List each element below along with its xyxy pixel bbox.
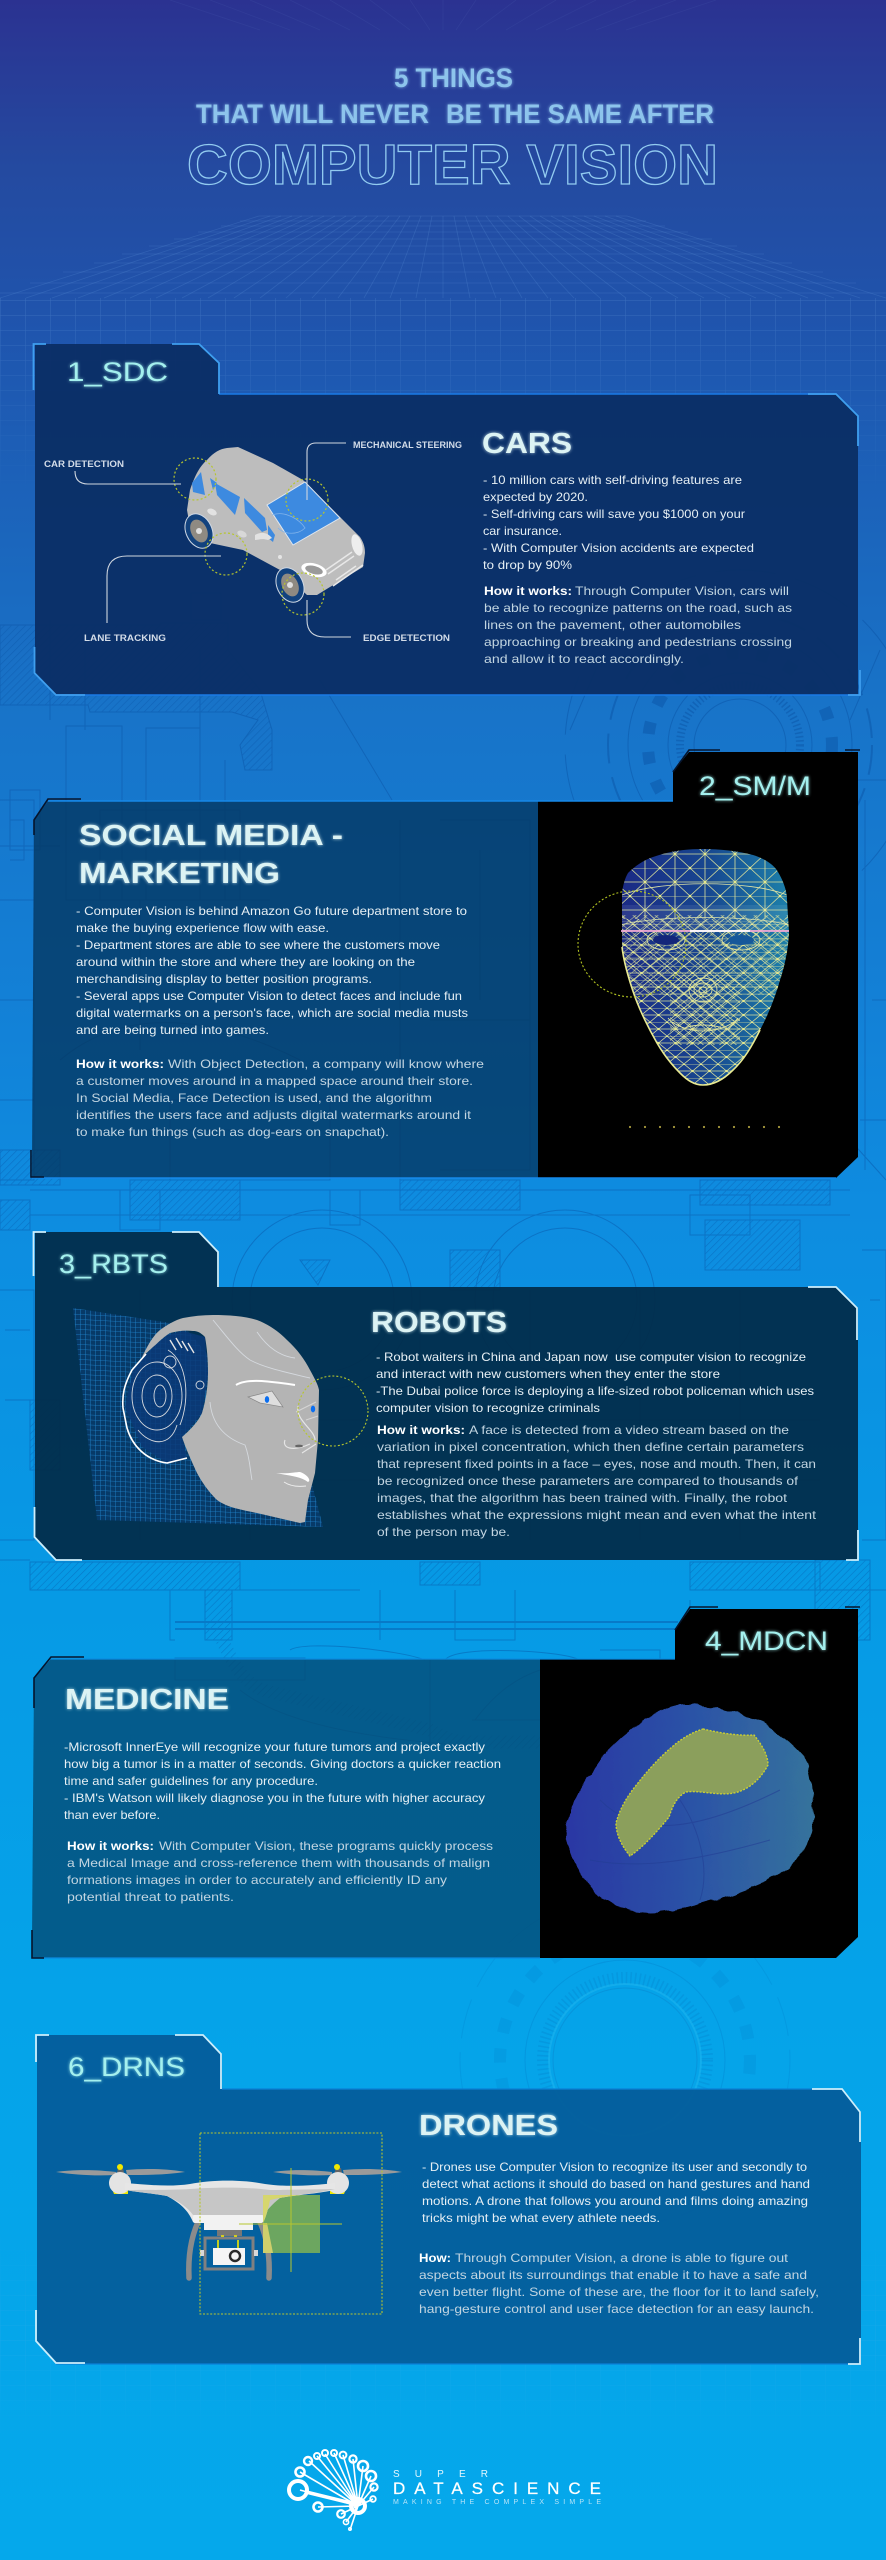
facts text: - Self-driving cars will save you $1000 on your [483, 507, 745, 521]
how it works text: hang-gesture control and user face detection for an easy launch. [419, 2302, 814, 2316]
how it works text: With Computer Vision, these programs quickly process [159, 1839, 493, 1853]
car labels: MECHANICAL STEERING [353, 440, 462, 451]
how it works text [377, 1423, 817, 1539]
logo brain mark [289, 2450, 378, 2530]
facts text: - Computer Vision is behind Amazon Go future department store to [76, 904, 467, 918]
facts text: than ever before. [64, 1808, 160, 1822]
detection circles [174, 458, 328, 615]
title line 2: BE THE SAME AFTER [446, 99, 714, 129]
face mesh [578, 849, 795, 1089]
panel: medicine [32, 1607, 860, 1958]
facts text: digital watermarks on a person's face, which are social media musts [76, 1006, 468, 1020]
target frame [200, 2133, 382, 2314]
panel: social media marketing [31, 750, 860, 1178]
title line 1: 5 THINGS [394, 63, 513, 93]
how it works text [67, 1839, 493, 1904]
brain scan [565, 1704, 814, 1913]
facts text [422, 2160, 810, 2225]
facts text: time and safer guidelines for any procedure. [64, 1774, 318, 1788]
facts text: merchandising display to better position programs. [76, 972, 372, 986]
logo [289, 2450, 601, 2530]
how it works text: images, that the algorithm has been trained with. Finally, the robot [377, 1491, 788, 1505]
how it works text: lines on the pavement, other automobiles [484, 618, 741, 632]
tab label: 1_SDC [67, 357, 168, 387]
how it works text: to make fun things (such as dog-ears on snapchat). [76, 1125, 389, 1139]
how it works text: With Object Detection, a company will know where [168, 1057, 484, 1071]
facts text: expected by 2020. [483, 490, 588, 504]
logo wordmark [393, 2469, 601, 2506]
propellers [56, 2169, 402, 2175]
facts text: - With Computer Vision accidents are expected [483, 541, 754, 555]
panel: robots [34, 1232, 858, 1560]
facts text: to drop by 90% [483, 558, 572, 572]
facts text: - IBM's Watson will likely diagnose you in the future with higher accuracy [64, 1791, 485, 1805]
how it works text [76, 1057, 484, 1139]
gimbal camera [217, 2230, 242, 2236]
facts text [64, 1740, 501, 1822]
facts text: - Several apps use Computer Vision to detect faces and include fun [76, 989, 462, 1003]
how it works text [484, 584, 792, 666]
car illustration [180, 447, 365, 607]
how it works text: even better flight. Some of these are, the floor for it to land safely, [419, 2285, 819, 2299]
tab label: 6_DRNS [68, 2052, 185, 2082]
how it works text: be recognized once these parameters are compared to thousands of [377, 1474, 799, 1488]
how it works text: How it works: [76, 1057, 164, 1071]
how it works text: that represent fixed points in a face – eyes, nose and mouth. Then, it can [377, 1457, 816, 1471]
how it works text: How it works: [377, 1423, 465, 1437]
drone illustration [56, 2133, 402, 2314]
facts text: how big a tumor is in a matter of seconds. Giving doctors a quicker reaction [64, 1757, 501, 1771]
how it works text: Through Computer Vision, a drone is able to figure out [455, 2251, 789, 2265]
facts text: -The Dubai police force is deploying a life-sized robot policeman which uses [376, 1384, 814, 1398]
how it works text: How: [419, 2251, 451, 2265]
how it works text: In Social Media, Face Detection is used, and the algorithm [76, 1091, 432, 1105]
title [187, 63, 718, 197]
heading: ROBOTS [371, 1307, 507, 1339]
logo wordmark: DATASCIENCE [393, 2479, 601, 2498]
how it works text: A face is detected from a video stream based on the [469, 1423, 789, 1437]
facts text: motions. A drone that follows you around and films doing amazing [422, 2194, 808, 2208]
how it works text: approaching or breaking and pedestrians crossing [484, 635, 792, 649]
blueprint line art [0, 570, 886, 2225]
facts text: - Department stores are able to see where the customers move [76, 938, 440, 952]
how it works text: formations images in order to accurately and efficiently ID any [67, 1873, 447, 1887]
how it works text: How it works: [484, 584, 572, 598]
how it works text: identifies the users face and adjusts digital watermarks around it [76, 1108, 472, 1122]
facts text: around within the store and where they are looking on the [76, 955, 415, 969]
legs [189, 2222, 269, 2278]
facts text: - 10 million cars with self-driving features are [483, 473, 742, 487]
facts text: - Robot waiters in China and Japan now use computer vision to recognize [376, 1350, 806, 1364]
car labels: EDGE DETECTION [363, 633, 450, 644]
how it works text: of the person may be. [377, 1525, 510, 1539]
how it works text: variation in pixel concentration, which then define certain parameters [377, 1440, 804, 1454]
panel: drones [36, 2035, 861, 2364]
heading: MARKETING [79, 858, 280, 890]
facts text: car insurance. [483, 524, 562, 538]
how it works text: a customer moves around in a mapped space around their store. [76, 1074, 473, 1088]
leader lines [75, 443, 351, 637]
facts text: - Drones use Computer Vision to recognize its user and secondly to [422, 2160, 807, 2174]
facts text: make the buying experience flow with ease. [76, 921, 329, 935]
facts text: computer vision to recognize criminals [376, 1401, 600, 1415]
tab label: 2_SM/M [699, 771, 811, 801]
how it works text: potential threat to patients. [67, 1890, 234, 1904]
how it works text: aspects about its surroundings that enable it to have a safe and [419, 2268, 807, 2282]
how it works text: and allow it to react accordingly. [484, 652, 684, 666]
drone section ring [549, 1984, 701, 2136]
heading [79, 820, 343, 890]
logo wordmark: MAKING THE COMPLEX SIMPLE [393, 2499, 601, 2506]
how it works text: How it works: [67, 1839, 154, 1853]
car labels [44, 440, 462, 644]
car labels: CAR DETECTION [44, 459, 124, 470]
how it works text [419, 2251, 819, 2316]
facts text: tricks might be what every athlete needs. [422, 2211, 660, 2225]
heading: DRONES [419, 2110, 558, 2142]
facts text [376, 1350, 814, 1415]
heading: MEDICINE [65, 1684, 229, 1716]
facts text: -Microsoft InnerEye will recognize your future tumors and project exactly [64, 1740, 485, 1754]
how it works text: be able to recognize patterns on the road, such as [484, 601, 792, 615]
how it works text: establishes what the expressions might mean and even what the intent [377, 1508, 817, 1522]
facts text [76, 904, 468, 1037]
facts text [483, 473, 754, 572]
tab label: 4_MDCN [705, 1626, 828, 1656]
title line 2 [196, 99, 714, 129]
drone body [109, 2172, 131, 2194]
logo wordmark: SUPER [393, 2469, 488, 2480]
how it works text: Through Computer Vision, cars will [575, 584, 789, 598]
heading: SOCIAL MEDIA - [79, 820, 343, 852]
robot head [73, 1308, 323, 1527]
facts text: and interact with new customers when they enter the store [376, 1367, 720, 1381]
tab label: 3_RBTS [59, 1249, 168, 1279]
title line 2: THAT WILL NEVER [196, 99, 429, 129]
facts text: and are being turned into games. [76, 1023, 269, 1037]
facts text: detect what actions it should do based on hand gestures and hand [422, 2177, 810, 2191]
panel: cars [34, 344, 860, 695]
car labels: LANE TRACKING [84, 633, 166, 644]
how it works text: a Medical Image and cross-reference them with thousands of malign [67, 1856, 490, 1870]
dot row [629, 1126, 780, 1128]
title line 3 outlined: COMPUTER VISION [187, 133, 718, 197]
detection circle [298, 1376, 368, 1446]
heading: CARS [482, 428, 572, 460]
